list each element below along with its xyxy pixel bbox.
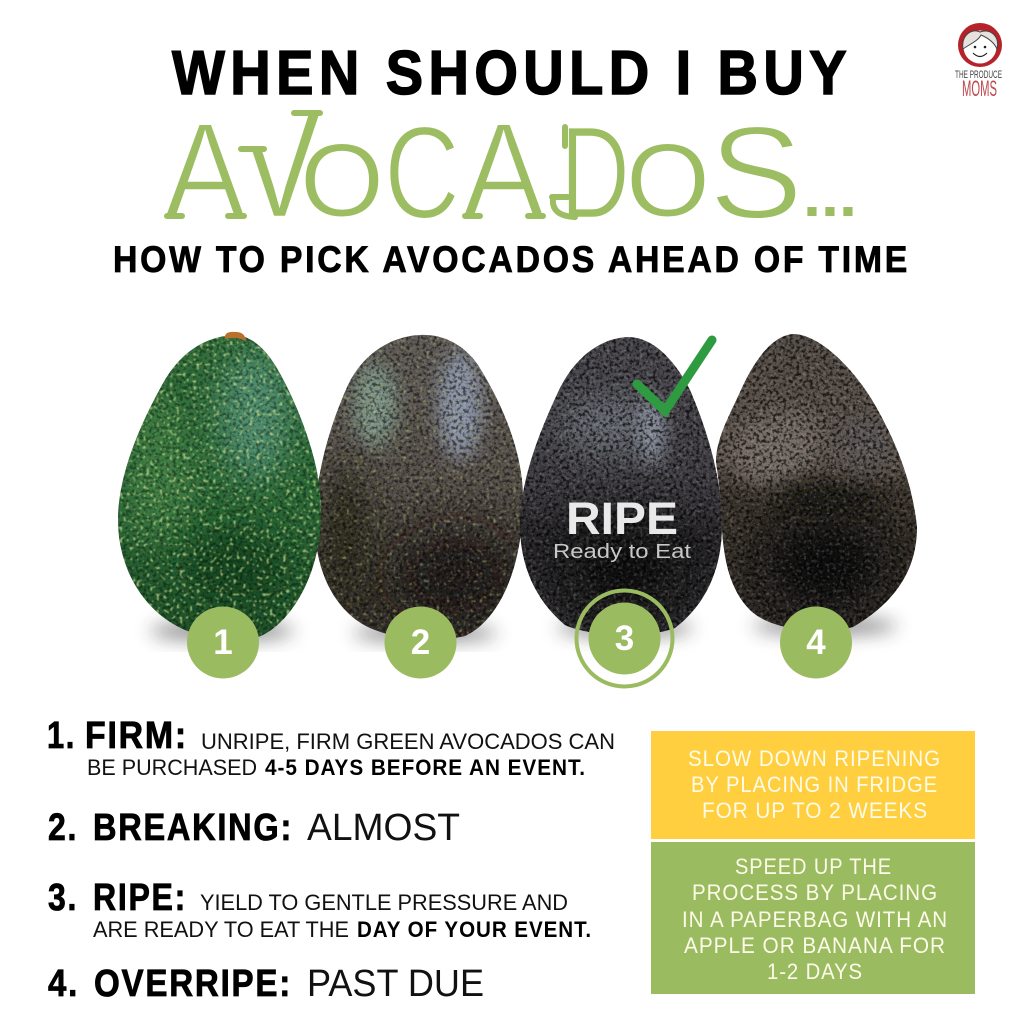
panel: speed up ripening: PROCESS BY PLACING — [692, 880, 938, 905]
stage 3: ripe: RIPE: — [93, 877, 187, 919]
number badge 3 with ring — [576, 590, 672, 686]
title: avocados hand-lettered word: A — [462, 95, 546, 248]
avocado 2: breaking — [317, 334, 523, 638]
stage 1: firm: UNRIPE, FIRM GREEN AVOCADOS CAN — [201, 729, 615, 754]
avocado shadows — [150, 617, 897, 642]
number badge 1 — [187, 606, 259, 678]
avocado 1 stem — [225, 332, 246, 341]
panel: slow down ripening: FOR UP TO 2 WEEKS — [702, 798, 928, 823]
stage 3: ripe: ARE READY TO EAT THE — [93, 917, 349, 942]
title: avocados hand-lettered word: D — [560, 99, 630, 246]
title: avocados hand-lettered word: ... — [803, 162, 857, 229]
avocado 3: ripe — [520, 337, 722, 632]
title: avocados hand-lettered word: O — [300, 123, 384, 239]
number badge 4 — [780, 606, 852, 678]
stage 4: overripe: 4. — [48, 963, 79, 1005]
number badge 3 with ring: 3 — [615, 619, 634, 658]
panel: speed up ripening: SPEED UP THE — [735, 854, 892, 879]
stage 3: ripe — [48, 877, 592, 942]
ripe label: RIPE — [566, 493, 678, 544]
stage 1: firm: 4-5 DAYS BEFORE AN EVENT. — [265, 755, 586, 780]
number badge 4: 4 — [806, 623, 826, 662]
subtitle: HOW TO PICK AVOCADOS AHEAD OF TIME — [113, 239, 910, 280]
panel: speed up ripening: IN A PAPERBAG WITH AN — [682, 907, 948, 932]
stage 3: ripe: YIELD TO GENTLE PRESSURE AND — [200, 890, 568, 915]
panel: slow down ripening: SLOW DOWN RIPENING — [688, 746, 941, 771]
stage 1: firm: 1. — [47, 715, 76, 757]
panel: speed up ripening: APPLE OR BANANA FOR — [684, 933, 946, 958]
stage 4: overripe — [48, 963, 484, 1005]
number badge 2: 2 — [411, 623, 430, 662]
stage 1: firm: BE PURCHASED — [87, 755, 257, 780]
title: avocados hand-lettered word: O — [626, 123, 710, 239]
title: avocados hand-lettered word: A — [164, 95, 247, 248]
panel: slow down ripening: BY PLACING IN FRIDGE — [691, 772, 938, 797]
stage 1: firm: FIRM: — [85, 715, 188, 757]
panel: speed up ripening: 1-2 DAYS — [767, 959, 863, 984]
stage 2: breaking: BREAKING: — [93, 807, 293, 849]
avocado 4: overripe — [716, 334, 917, 628]
title: avocados hand-lettered word — [164, 77, 857, 250]
title: avocados hand-lettered word: S — [709, 99, 803, 246]
title: when should I buy: WHEN SHOULD I BUY — [172, 39, 852, 108]
stage 1: firm — [47, 715, 615, 780]
title: avocados hand-lettered word: C — [384, 99, 460, 246]
panel: speed up ripening — [651, 842, 975, 994]
stage 2: breaking: 2. — [48, 807, 78, 849]
stage 4: overripe: OVERRIPE: — [94, 963, 292, 1005]
check mark — [637, 340, 712, 411]
avocado 1: firm — [118, 332, 321, 637]
panel: slow down ripening — [651, 731, 975, 839]
logo: the produce moms — [955, 23, 1002, 101]
stage 2: breaking — [48, 807, 460, 849]
stage 3: ripe: 3. — [48, 877, 78, 919]
title: avocados hand-lettered word: V — [237, 77, 322, 250]
stage 3: ripe: DAY OF YOUR EVENT. — [357, 917, 592, 942]
number badge 2 — [384, 606, 456, 678]
number badge 1: 1 — [213, 623, 233, 662]
ripe label: Ready to Eat — [553, 541, 692, 563]
stage 4: overripe: PAST DUE — [307, 963, 484, 1005]
stage 2: breaking: ALMOST — [307, 807, 460, 849]
ripe label — [553, 493, 692, 563]
